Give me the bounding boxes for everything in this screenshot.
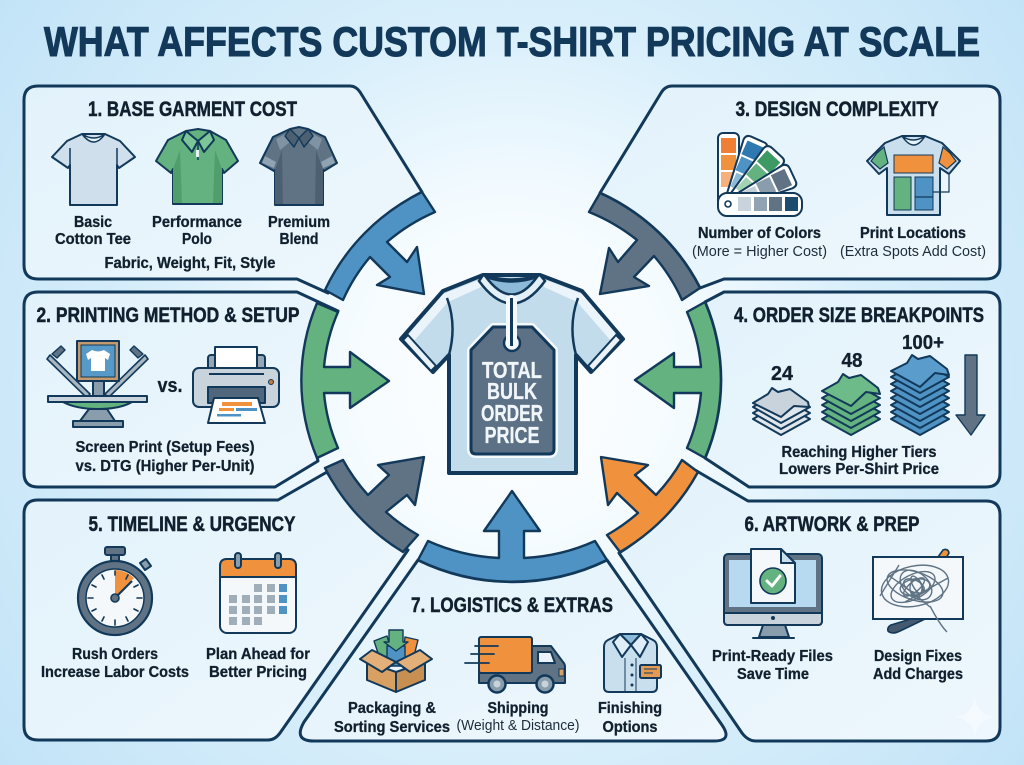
text: reaching higher tiers bbox=[779, 444, 939, 478]
label: basic cotton tee bbox=[55, 214, 131, 248]
icon: stopwatch bbox=[78, 547, 152, 635]
arrow ring: converging cost segments bbox=[301, 192, 721, 582]
label: rush orders: Increase Labor Costs bbox=[41, 664, 189, 681]
icon: colour swatch fan bbox=[717, 133, 802, 216]
icon: calendar bbox=[220, 553, 296, 633]
arrow: order size bbox=[635, 302, 721, 458]
label: finishing bbox=[598, 700, 662, 736]
heading: artwork: 6. ARTWORK & PREP bbox=[744, 513, 920, 536]
panel: order size breakpoints bbox=[705, 292, 1000, 487]
panel: artwork and prep bbox=[619, 470, 1000, 741]
arrow: design complexity bbox=[589, 193, 700, 300]
icon: medium stack of shirts bbox=[822, 374, 880, 435]
icon: screen printing press bbox=[47, 341, 148, 427]
label: number of colors bbox=[692, 225, 827, 260]
number: 100+: 100+ bbox=[902, 332, 944, 354]
label: shipping bbox=[456, 700, 580, 734]
arrow: price decreasing bbox=[956, 355, 985, 435]
panel: base garment cost bbox=[24, 86, 422, 293]
icon: monitor with print-ready file bbox=[724, 549, 822, 638]
icon: small stack of shirts bbox=[753, 388, 810, 435]
panel: design complexity bbox=[600, 86, 1000, 288]
label: rush orders: Rush Orders bbox=[72, 646, 158, 663]
text: reaching higher tiers: Reaching Higher Tiers bbox=[782, 444, 937, 461]
label: performance polo: Polo bbox=[182, 231, 212, 248]
icon: delivery truck bbox=[465, 637, 565, 692]
text: screen print vs dtg: Screen Print (Setup Fees) bbox=[76, 439, 254, 456]
label: premium blend: Premium bbox=[268, 214, 330, 231]
arrow: timeline bbox=[325, 457, 424, 552]
heading: timeline: 5. TIMELINE & URGENCY bbox=[88, 513, 296, 536]
label: print-ready files: Save Time bbox=[737, 666, 809, 683]
text: total bulk order price bbox=[481, 357, 543, 448]
number: 24: 24 bbox=[771, 363, 794, 385]
heading: base garment cost: 1. BASE GARMENT COST bbox=[88, 98, 297, 121]
icon: basic cotton tee bbox=[52, 134, 135, 205]
text: total bulk order price: TOTAL bbox=[482, 357, 542, 383]
label: premium blend bbox=[268, 214, 330, 248]
panel: logistics and extras bbox=[300, 560, 726, 741]
label: finishing: Options bbox=[602, 719, 658, 736]
label: shipping: (Weight & Distance) bbox=[456, 717, 580, 734]
arrow: logistics bbox=[418, 491, 607, 582]
label: basic cotton tee: Basic bbox=[74, 214, 112, 231]
label: rush orders bbox=[41, 646, 189, 681]
icon: finished shirt with label bbox=[604, 634, 661, 692]
icon: premium blend shirt bbox=[260, 127, 337, 205]
arrow: artwork bbox=[601, 457, 698, 552]
label: packaging: Sorting Services bbox=[334, 719, 450, 736]
label: packaging bbox=[334, 700, 450, 736]
icon: dtg printer bbox=[193, 347, 279, 423]
label: basic cotton tee: Cotton Tee bbox=[55, 231, 131, 248]
price tag bbox=[471, 295, 554, 454]
text: reaching higher tiers: Lowers Per-Shirt Price bbox=[779, 461, 939, 478]
label: design fixes: Design Fixes bbox=[874, 648, 962, 665]
text: vs: vs. bbox=[158, 375, 182, 397]
label: design fixes bbox=[873, 648, 963, 683]
label: print-ready files: Print-Ready Files bbox=[712, 648, 833, 665]
label: premium blend: Blend bbox=[280, 231, 318, 248]
icon: large stack of shirts bbox=[891, 355, 949, 435]
text: screen print vs dtg bbox=[76, 439, 254, 475]
label: performance polo: Performance bbox=[152, 214, 242, 231]
heading: design complexity: 3. DESIGN COMPLEXITY bbox=[736, 98, 938, 121]
icon: performance polo bbox=[156, 129, 238, 204]
label: number of colors: Number of Colors bbox=[698, 225, 821, 242]
label: number of colors: (More = Higher Cost) bbox=[692, 243, 827, 260]
centre t-shirt with price tag bbox=[401, 275, 623, 473]
text: total bulk order price: PRICE bbox=[484, 422, 540, 448]
text: screen print vs dtg: vs. DTG (Higher Per-Unit) bbox=[76, 458, 254, 475]
label: print locations: (Extra Spots Add Cost) bbox=[840, 243, 986, 260]
label: finishing: Finishing bbox=[598, 700, 662, 717]
arrow: base garment bbox=[325, 192, 435, 300]
text: total bulk order price: ORDER bbox=[481, 400, 543, 426]
label: print locations bbox=[840, 225, 986, 260]
label: plan ahead: Plan Ahead for bbox=[206, 646, 310, 663]
label: packaging: Packaging & bbox=[348, 700, 436, 717]
text: total bulk order price: BULK bbox=[487, 378, 537, 404]
label: print locations: Print Locations bbox=[860, 225, 966, 242]
label: plan ahead bbox=[206, 646, 310, 681]
panel: timeline and urgency bbox=[24, 472, 408, 740]
heading: logistics: 7. LOGISTICS & EXTRAS bbox=[411, 594, 613, 617]
label: shipping: Shipping bbox=[488, 700, 548, 717]
text: fabric weight fit style: Fabric, Weight, Fit, Style bbox=[104, 255, 276, 272]
icon: packaging box bbox=[360, 630, 432, 692]
label: design fixes: Add Charges bbox=[873, 666, 963, 683]
label: plan ahead: Better Pricing bbox=[209, 664, 307, 681]
number: 48: 48 bbox=[842, 350, 862, 372]
arrow: printing method bbox=[301, 303, 389, 458]
heading: printing method: 2. PRINTING METHOD & SETUP bbox=[36, 304, 300, 327]
label: print-ready files bbox=[712, 648, 833, 683]
icon: print locations shirt bbox=[867, 136, 960, 215]
panel: printing method and setup bbox=[24, 292, 338, 487]
icon: sparkle watermark bbox=[956, 698, 994, 736]
icon: messy scribble artwork bbox=[873, 549, 963, 633]
label: performance polo bbox=[152, 214, 242, 248]
